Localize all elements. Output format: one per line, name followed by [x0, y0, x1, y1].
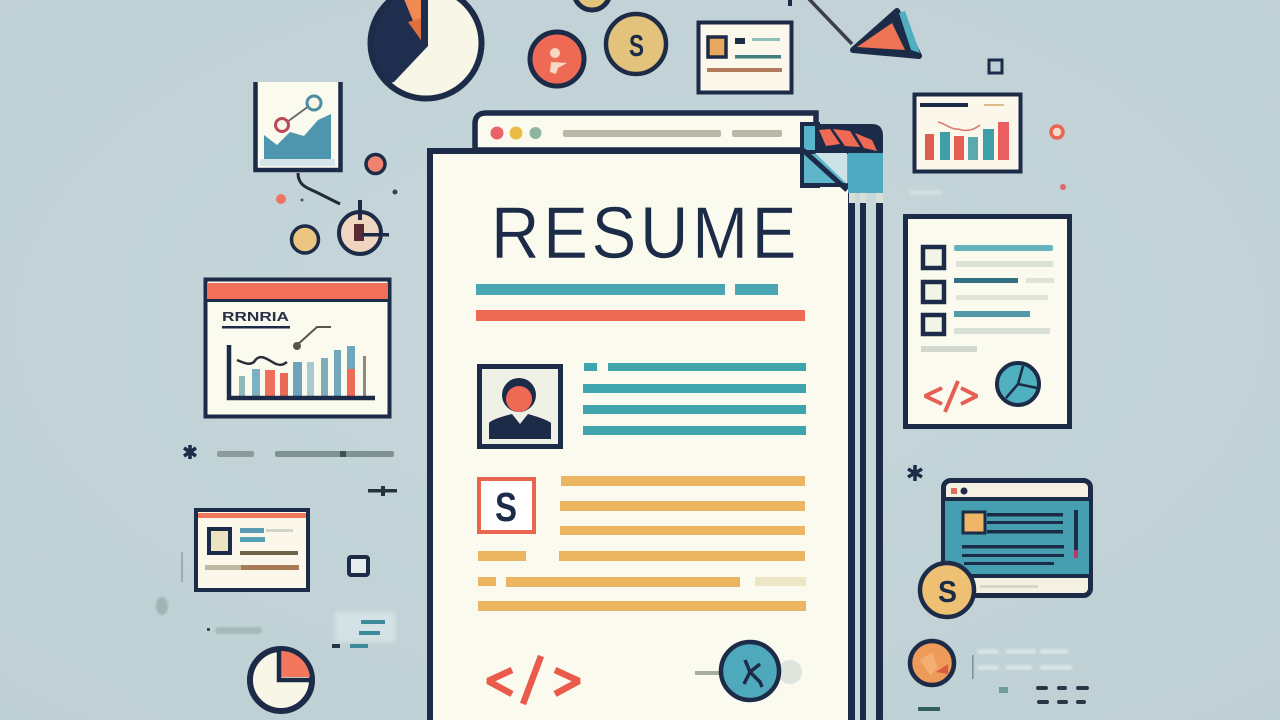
browser tab [475, 113, 816, 150]
icon: dollar coin [606, 14, 666, 74]
coral rule [476, 310, 805, 321]
card: browser window teal [943, 480, 1091, 596]
icon: coral dots right [1051, 126, 1066, 190]
chart card: top right bars [914, 94, 1020, 172]
portrait [480, 366, 560, 446]
icon: dollar coin: S [629, 28, 644, 63]
grey rule marks [217, 451, 397, 496]
title: RESUME [491, 192, 796, 274]
icon: target crosshair [339, 200, 389, 254]
icon: small square top right [989, 60, 1002, 73]
mini heading: RRNRIA [222, 309, 290, 324]
card: small profile left [196, 510, 308, 590]
icon: megaphone triangle with line [790, 0, 920, 56]
chart card: bars with coral header [206, 280, 390, 416]
icon: large pie chart top [360, 0, 482, 98]
code glyph [488, 656, 579, 704]
runner icon [695, 642, 802, 700]
bars [239, 346, 366, 398]
thumb [963, 512, 985, 533]
icon: orange globe [910, 641, 954, 685]
icon: coral person badge [530, 32, 584, 86]
teal lines [583, 363, 806, 435]
resume page [430, 151, 851, 720]
teal heading rule [476, 284, 778, 295]
icon: small rounded square [349, 557, 368, 575]
faded marks left [156, 552, 395, 648]
code glyph [925, 381, 977, 412]
page corner fold [802, 124, 883, 203]
checkboxes [923, 247, 944, 334]
window dots [490, 126, 542, 140]
icon: dollar coin right [920, 563, 974, 617]
icon: ring beige [292, 226, 318, 253]
bars [925, 122, 1009, 160]
card: checklist document [906, 216, 1070, 426]
star left [184, 445, 196, 459]
document stack edge lines [849, 190, 883, 720]
dollar box [479, 479, 534, 532]
faded text marks bottom right [918, 649, 1089, 711]
icon: small dots [276, 190, 398, 204]
icon: small pie chart bottom left [250, 649, 312, 711]
card: small profile top [698, 22, 792, 92]
pie icon [997, 363, 1039, 405]
dollar box: S [495, 484, 517, 530]
chart card: area line [255, 82, 340, 170]
amber lines [478, 476, 806, 611]
icon: star right [908, 465, 922, 481]
icon: small coral circle [366, 154, 385, 174]
icon: coin top partial [574, 0, 610, 10]
connector line [298, 173, 340, 204]
icon: dollar coin right: S [938, 574, 957, 609]
